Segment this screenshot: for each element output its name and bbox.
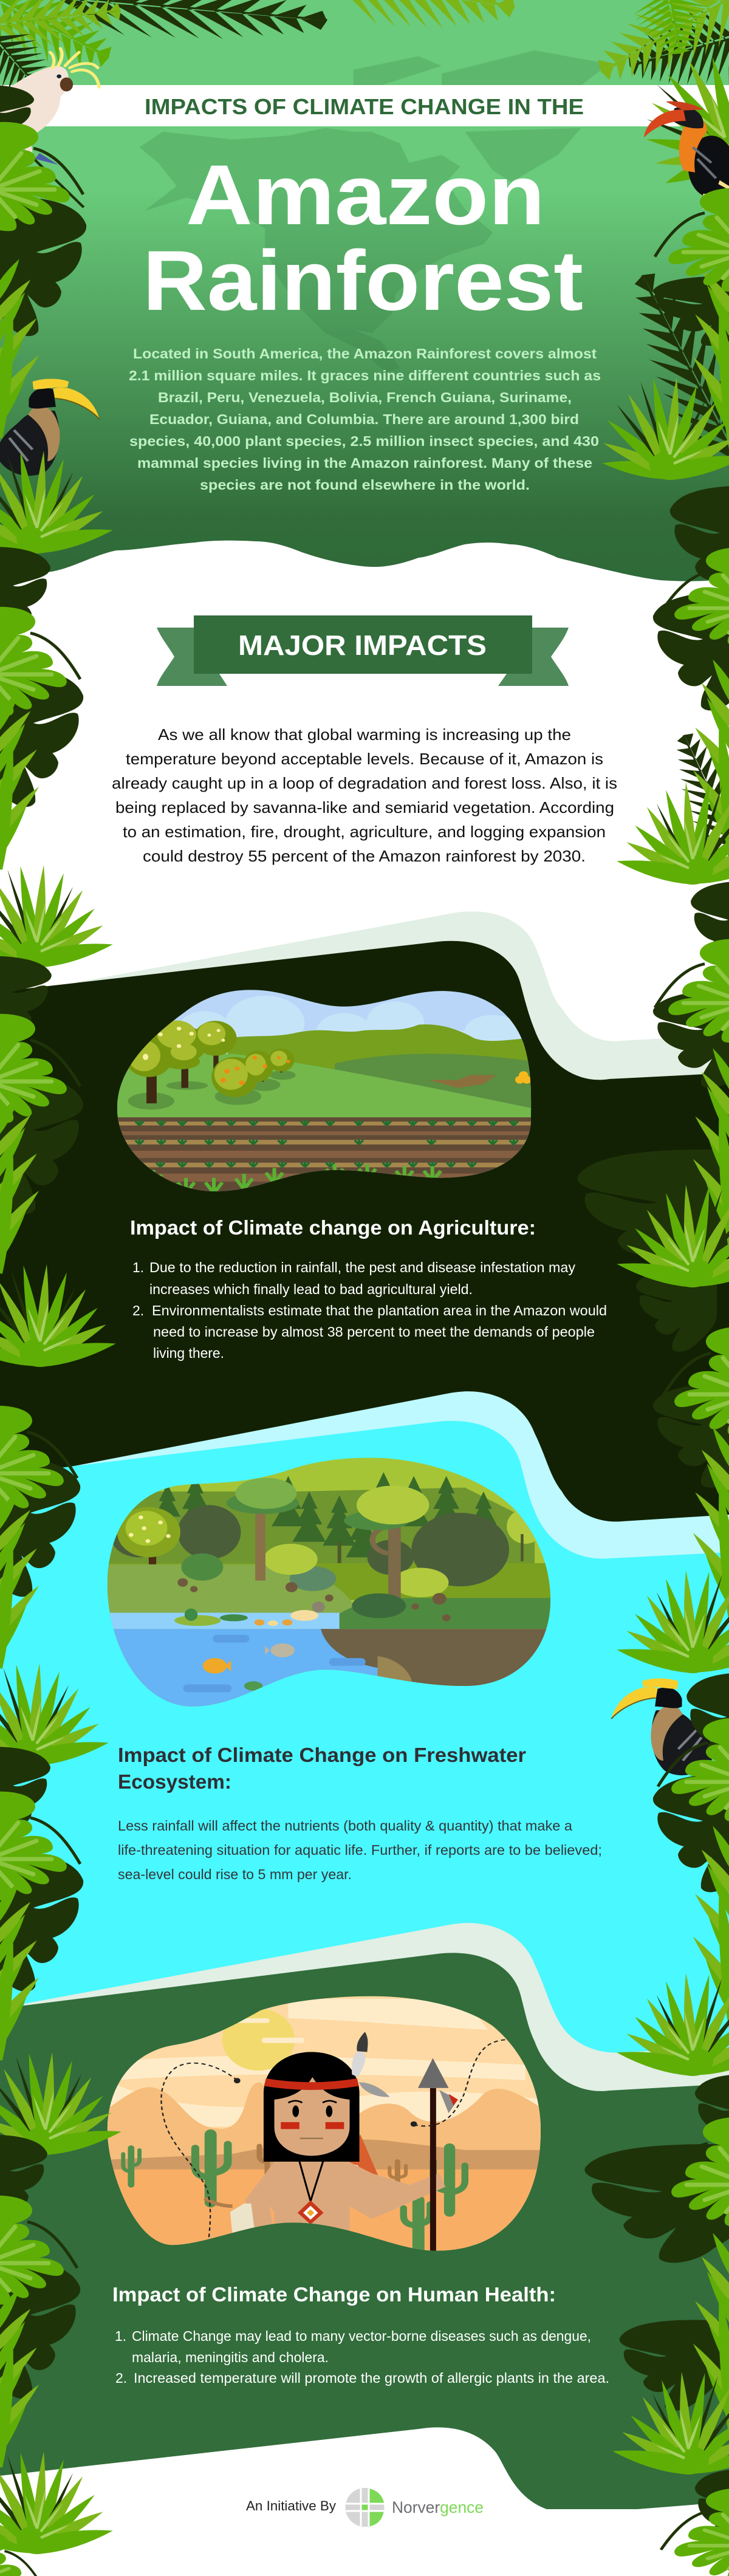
foliage: right column leaves and palms: [601, 188, 729, 2576]
title band: [0, 85, 729, 126]
agriculture list: 2.: [132, 1303, 144, 1318]
illustration: farm scene: [112, 984, 539, 1201]
foliage: dark leaves on health panel: [584, 2144, 729, 2411]
panel: freshwater background: [0, 1421, 729, 2066]
health list: Increased temperature will promote the growth of allergic plants in the area.: [134, 2370, 609, 2386]
foliage: top palm fronds: [0, 0, 729, 201]
panel: human health background: [0, 1953, 729, 2509]
agriculture list: [132, 1259, 607, 1361]
foliage: left column leaves and palms: [0, 84, 123, 2576]
health list: 2.: [115, 2370, 127, 2386]
panel: agriculture background: [0, 941, 729, 1580]
major impacts paragraph: temperature beyond acceptable levels. Because of it, Amazon is: [126, 750, 603, 768]
intro paragraph: species, 40,000 plant species, 2.5 million insect species, and 430: [129, 433, 599, 449]
illustration: indigenous person in desert scene: [102, 1991, 549, 2255]
freshwater paragraph: [118, 1818, 602, 1882]
health heading: Impact of Climate Change on Human Health:: [112, 2283, 556, 2306]
footer: initiative credit: [246, 2488, 484, 2527]
cacti: [123, 2134, 465, 2253]
title: Amazon: Amazon: [186, 147, 545, 242]
ribbon heading: major impacts: MAJOR IMPACTS: [238, 629, 487, 661]
agriculture list: increases which finally lead to bad agricultural yield.: [149, 1281, 473, 1297]
illustration: freshwater scene: [102, 1453, 558, 1712]
freshwater heading: Ecosystem:: [118, 1770, 231, 1793]
freshwater heading: [118, 1744, 526, 1793]
swoosh: pale edge above freshwater panel: [36, 1391, 729, 1580]
intro paragraph: 2.1 million square miles. It graces nine different countries such as: [129, 368, 601, 383]
water and bank: [107, 1578, 558, 1710]
tipi: [349, 2134, 378, 2175]
panel: header with green gradient and wavy bottom edge: [0, 0, 729, 581]
freshwater heading: Impact of Climate Change on Freshwater: [118, 1744, 526, 1766]
ribbon heading: major impacts: [157, 615, 569, 686]
health list: [115, 2328, 609, 2386]
icon: yellow-billed hornbill, right: [611, 1678, 716, 1775]
agriculture list: Environmentalists estimate that the plantation area in the Amazon would: [152, 1303, 607, 1318]
agriculture list: Due to the reduction in rainfall, the pest and disease infestation may: [149, 1259, 575, 1275]
intro paragraph: mammal species living in the Amazon rainforest. Many of these: [137, 455, 592, 471]
footer: initiative credit: Norvergence: [392, 2498, 484, 2516]
title: Rainforest: Rainforest: [143, 233, 583, 328]
title: impacts line: IMPACTS OF CLIMATE CHANGE IN THE: [145, 94, 584, 119]
major impacts paragraph: being replaced by savanna-like and semiarid vegetation. According: [115, 798, 614, 817]
icon: cockatoo: [0, 49, 99, 207]
icon: Norvergence globe logo: [345, 2488, 384, 2527]
intro paragraph: Ecuador, Guiana, and Columbia. There are around 1,300 bird: [149, 411, 579, 427]
footer: initiative credit: An Initiative By: [246, 2498, 336, 2513]
intro paragraph: Located in South America, the Amazon Rainforest covers almost: [133, 346, 597, 361]
agriculture list: need to increase by almost 38 percent to meet the demands of people: [153, 1324, 595, 1340]
freshwater paragraph: sea-level could rise to 5 mm per year.: [118, 1866, 352, 1882]
orchard trees: [123, 1021, 296, 1109]
skull: [230, 2204, 255, 2235]
trees: [117, 1478, 544, 1618]
intro paragraph: Brazil, Peru, Venezuela, Bolivia, French Guiana, Suriname,: [158, 389, 572, 405]
major impacts paragraph: already caught up in a loop of degradation and forest loss. Also, it is: [112, 774, 617, 792]
spear: [418, 2058, 458, 2253]
agriculture list: 1.: [132, 1259, 144, 1275]
swoosh: pale edge above agriculture panel: [0, 911, 729, 1094]
freshwater paragraph: life-threatening situation for aquatic life. Further, if reports are to be believed;: [118, 1842, 602, 1858]
soil rows: [112, 1117, 539, 1195]
major impacts paragraph: [112, 725, 617, 865]
agriculture heading: Impact of Climate change on Agriculture:: [130, 1216, 536, 1239]
freshwater paragraph: Less rainfall will affect the nutrients (both quality & quantity) that make a: [118, 1818, 572, 1834]
health list: malaria, meningitis and cholera.: [132, 2349, 329, 2365]
major impacts paragraph: could destroy 55 percent of the Amazon rainforest by 2030.: [143, 847, 586, 865]
icon: orange-billed hornbill: [644, 101, 729, 209]
person: [245, 2032, 445, 2253]
major impacts paragraph: As we all know that global warming is increasing up the: [158, 725, 571, 744]
agriculture list: living there.: [153, 1345, 224, 1361]
major impacts paragraph: to an estimation, fire, drought, agriculture, and logging expansion: [123, 823, 606, 841]
health list: Climate Change may lead to many vector-borne diseases such as dengue,: [132, 2328, 591, 2344]
foliage: faint leaves on agriculture panel: [0, 1074, 729, 1488]
health list: 1.: [115, 2328, 126, 2344]
icon: yellow-billed hornbill, left: [0, 379, 100, 476]
intro paragraph: species are not found elsewhere in the world.: [200, 477, 530, 493]
bushes and ground: [107, 1505, 558, 1629]
flight paths: [161, 2040, 507, 2239]
panel: white footer: [0, 2427, 729, 2576]
swoosh: pale edge above health panel: [24, 1923, 729, 2108]
intro paragraph: [129, 346, 601, 493]
world map silhouette: [140, 50, 609, 372]
